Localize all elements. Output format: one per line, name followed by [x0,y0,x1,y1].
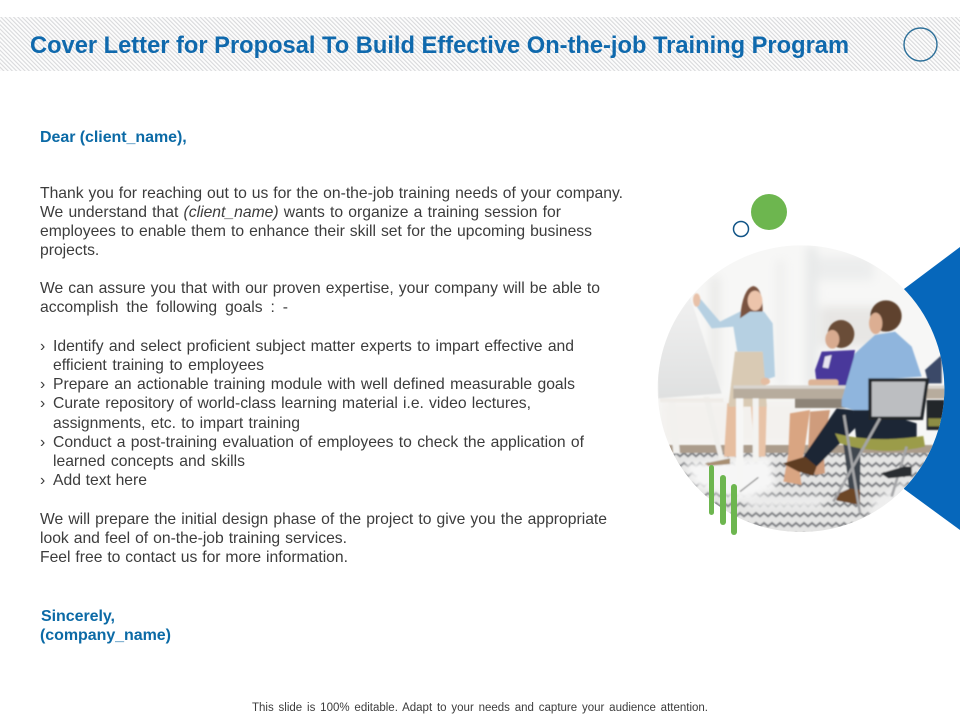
footer note: This slide is 100% editable. Adapt to your needs and capture your audience attention. [252,702,708,714]
icon: green circle [751,194,787,230]
text block: closing paragraph: Feel free to contact us for more information. [40,549,348,566]
list of goals: › [40,395,45,412]
text block: assurance: We can assure you that with our proven expertise, your company will be able to [40,280,600,297]
list of goals: learned concepts and skills [53,453,245,470]
text block: assurance: accomplish the following goals : - [40,299,288,316]
text block: introduction: projects. [40,242,99,259]
list of goals: › [40,472,45,489]
sign-off: (company_name) [40,627,171,644]
sign-off: Sincerely, [41,608,115,625]
list of goals: › [40,376,45,393]
text block: introduction: employees to enable them to enhance their skill set for the upcoming business [40,223,592,240]
table [733,386,947,399]
icon: header ring [903,27,938,62]
sign-off [40,608,171,644]
seated woman [783,410,810,485]
graphic: blue shape [904,247,960,530]
list of goals: Add text here [53,472,147,489]
text block: introduction: We understand that (client_name) wants to organize a training session for [40,204,561,221]
list of goals: › [40,434,45,451]
text block: assurance [40,280,600,316]
list of goals: Conduct a post-training evaluation of employees to check the application of [53,434,584,451]
man [843,443,861,492]
list of goals: › [40,338,45,355]
text block: introduction: Thank you for reaching out to us for the on-the-job training needs of your company. [40,185,623,202]
list of goals: assignments, etc. to impart training [53,415,300,432]
list of goals: efficient training to employees [53,357,264,374]
text block: closing paragraph: We will prepare the initial design phase of the project to give you the appropriate [40,511,607,528]
presenter [723,402,737,458]
header band [0,17,960,71]
text block: introduction [40,185,623,259]
text block: closing paragraph [40,511,607,566]
list of goals: Curate repository of world-class learning material i.e. video lectures, [53,395,531,412]
icon: green bars [709,465,737,535]
salutation: Dear (client_name), [40,129,187,146]
chair [870,380,927,418]
icon: small outlined circle [732,220,750,238]
title: Cover Letter for Proposal To Build Effective On-the-job Training Program [30,32,849,59]
text block: closing paragraph: look and feel of on-the-job training services. [40,530,347,547]
list of goals: Identify and select proficient subject matter experts to impart effective and [53,338,574,355]
list of goals: Prepare an actionable training module with well defined measurable goals [53,376,575,393]
list of goals [40,338,584,489]
photo: training session in circle [658,246,944,532]
